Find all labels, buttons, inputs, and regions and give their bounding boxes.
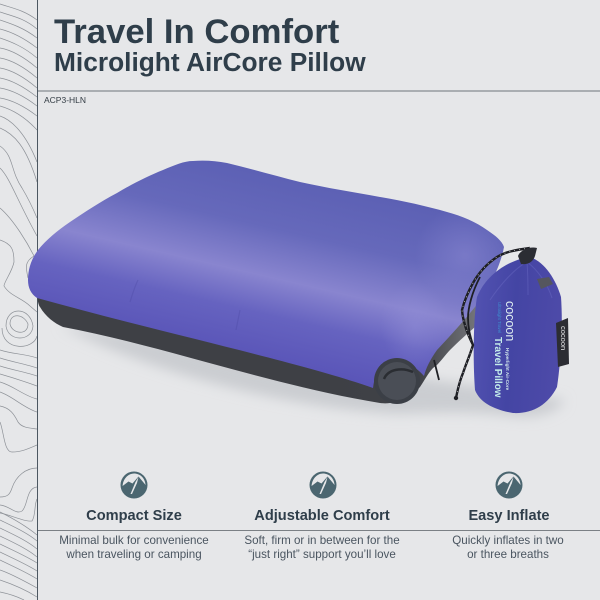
bag logo: cocoon (503, 301, 517, 341)
bag small label: Hyperlight Air-Core (505, 348, 510, 391)
zipper pull (434, 360, 439, 380)
icon: mountain badge 3 (496, 472, 522, 498)
cord end (454, 396, 458, 400)
topographic side strip (0, 4, 37, 600)
cord lock (518, 247, 537, 264)
text: compact size: Minimal bulk for convenience (59, 534, 209, 547)
title: Travel In Comfort (54, 13, 339, 51)
product code: ACP3-HLN (44, 95, 86, 105)
text: compact size: when traveling or camping (66, 548, 202, 560)
text: easy inflate: or three breaths (467, 548, 549, 560)
stuff sack (454, 247, 569, 413)
black tag (556, 318, 569, 367)
heading: compact size: Compact Size (86, 508, 182, 524)
bag product name: Travel Pillow (492, 337, 503, 398)
pillow shadow (60, 325, 565, 417)
bag blue label: Ultralight Travel (497, 302, 502, 333)
pillow valve (374, 358, 420, 404)
drawstring (456, 248, 530, 398)
text: easy inflate (452, 534, 564, 560)
text: compact size (59, 534, 209, 560)
text: adjustable comfort: “just right” support you’ll love (248, 548, 396, 560)
subtitle: Microlight AirCore Pillow (54, 47, 366, 77)
heading: adjustable comfort: Adjustable Comfort (254, 508, 390, 524)
pillow purple top (28, 160, 504, 388)
text: easy inflate: Quickly inflates in two (452, 534, 564, 547)
icon: mountain badge 2 (310, 472, 336, 498)
text: adjustable comfort: Soft, firm or in between for the (244, 534, 400, 547)
pillow dark underside (37, 260, 476, 403)
text: adjustable comfort (244, 534, 400, 560)
tag logo: cocoon (559, 326, 568, 350)
icon: mountain badge 1 (120, 472, 148, 498)
heading: easy inflate: Easy Inflate (468, 508, 550, 524)
side loop patch (537, 277, 553, 289)
pillow and stuff sack illustration (28, 160, 569, 420)
